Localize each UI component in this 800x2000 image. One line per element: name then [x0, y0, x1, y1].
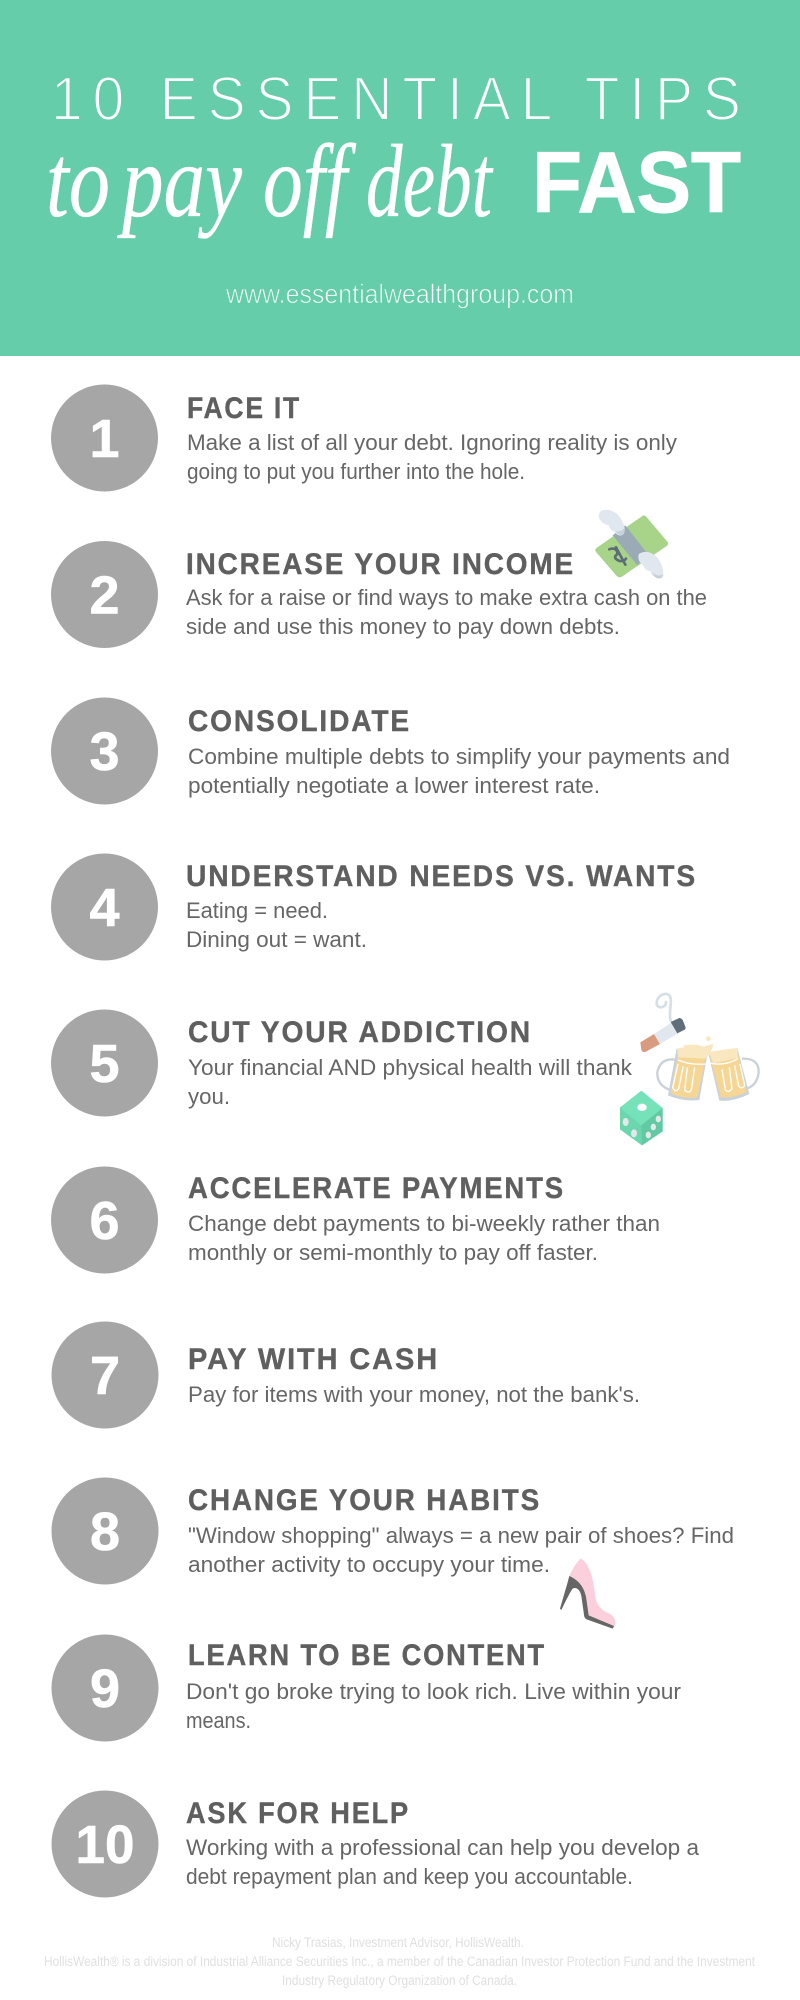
body text: going to put you further into the hole. — [187, 459, 525, 484]
body text: Dining out = want. — [186, 927, 367, 952]
bold word: FAST: FAST — [532, 135, 741, 231]
tip 7: pay with cash — [52, 1322, 640, 1428]
icon: green die — [620, 1091, 663, 1145]
body text: another activity to occupy your time. — [188, 1552, 550, 1577]
script subtitle: to pay off debt: debt — [366, 124, 493, 239]
number badge 2: 2 — [89, 566, 120, 626]
number badge 3: 3 — [89, 722, 120, 782]
number badge 5: 5 — [89, 1034, 120, 1094]
body text — [188, 1523, 734, 1577]
number badge 7: 7 — [90, 1346, 120, 1406]
website url: www.essentialwealthgroup.com — [225, 279, 574, 309]
footer disclaimer: Industry Regulatory Organization of Canada. — [282, 1973, 517, 1988]
number badge 1: 1 — [89, 409, 120, 469]
body text: Ask for a raise or find ways to make extra cash on the — [186, 585, 707, 610]
icon: flying money — [595, 510, 668, 579]
heading: CHANGE YOUR HABITS — [188, 1484, 541, 1517]
heading: UNDERSTAND NEEDS VS. WANTS — [186, 860, 697, 893]
number badge 2 — [51, 541, 158, 648]
heading: FACE IT — [187, 392, 301, 425]
heading: ASK FOR HELP — [186, 1797, 410, 1830]
number badge 1 — [51, 384, 158, 492]
script subtitle: to pay off debt: to — [46, 124, 110, 239]
tip 9: learn to be content — [52, 1634, 681, 1742]
body text — [188, 1211, 660, 1265]
tip 1: face it — [51, 384, 677, 492]
tip 3: consolidate — [51, 698, 730, 804]
body text — [187, 430, 677, 484]
footer disclaimer: Nicky Trasias, Investment Advisor, HollisWealth. — [272, 1935, 524, 1950]
body text: Change debt payments to bi-weekly rather than — [188, 1211, 660, 1236]
body text: Eating = need. — [186, 898, 328, 923]
header panel — [0, 0, 800, 356]
number badge 6 — [51, 1166, 158, 1274]
body text: Pay for items with your money, not the bank's. — [188, 1382, 640, 1407]
number badge 9: 9 — [90, 1659, 120, 1719]
body text: Combine multiple debts to simplify your payments and — [188, 744, 730, 769]
body text: means. — [186, 1708, 251, 1733]
body text — [188, 744, 730, 798]
icon: cigarette — [640, 994, 686, 1052]
heading: PAY WITH CASH — [188, 1343, 439, 1376]
body text — [186, 898, 367, 952]
tip 10: ask for help — [52, 1790, 700, 1898]
heading: ACCELERATE PAYMENTS — [188, 1172, 565, 1205]
body text: side and use this money to pay down debts. — [186, 614, 620, 639]
body text: Make a list of all your debt. Ignoring reality is only — [187, 430, 677, 455]
number badge 10 — [52, 1790, 158, 1898]
body text: you. — [188, 1084, 230, 1109]
tip 4: understand needs vs wants — [51, 854, 697, 960]
body text: Don't go broke trying to look rich. Live within your — [186, 1679, 681, 1704]
body text — [186, 1835, 700, 1889]
number badge 7 — [52, 1322, 158, 1428]
body text — [188, 1055, 633, 1109]
number badge 8: 8 — [90, 1502, 120, 1562]
number badge 5 — [51, 1010, 158, 1116]
icon: high heel shoe — [560, 1559, 615, 1629]
heading: LEARN TO BE CONTENT — [188, 1639, 546, 1672]
body text: Your financial AND physical health will thank — [188, 1055, 633, 1080]
number badge 3 — [51, 698, 158, 804]
number badge 10: 10 — [76, 1815, 134, 1875]
script subtitle: to pay off debt: pay — [116, 124, 243, 239]
heading: CONSOLIDATE — [188, 705, 411, 738]
icon: clinking beer mugs — [657, 1036, 759, 1101]
tip 6: accelerate payments — [51, 1166, 660, 1274]
tip 8: change your habits — [52, 1478, 734, 1629]
number badge 9 — [52, 1634, 158, 1742]
script subtitle: to pay off debt: off — [263, 124, 356, 239]
body text: Working with a professional can help you develop a — [186, 1835, 700, 1860]
heading: CUT YOUR ADDICTION — [188, 1016, 532, 1049]
number badge 6: 6 — [89, 1191, 120, 1251]
number badge 4 — [51, 854, 158, 960]
footer disclaimer — [44, 1935, 755, 1988]
body text — [186, 1679, 681, 1733]
title: 10 essential tips: 10 ESSENTIAL TIPS — [51, 64, 741, 134]
number badge 4: 4 — [89, 878, 120, 938]
body text: "Window shopping" always = a new pair of shoes? Find — [188, 1523, 734, 1548]
heading: INCREASE YOUR INCOME — [186, 548, 575, 581]
body text: potentially negotiate a lower interest rate. — [188, 773, 600, 798]
tip 5: cut your addiction — [51, 994, 759, 1145]
body text — [186, 585, 707, 639]
number badge 8 — [52, 1478, 158, 1584]
script subtitle: to pay off debt — [46, 124, 493, 239]
body text: debt repayment plan and keep you accountable. — [186, 1864, 633, 1889]
body text: monthly or semi-monthly to pay off faster. — [188, 1240, 598, 1265]
tip 2: increase your income — [51, 510, 707, 648]
